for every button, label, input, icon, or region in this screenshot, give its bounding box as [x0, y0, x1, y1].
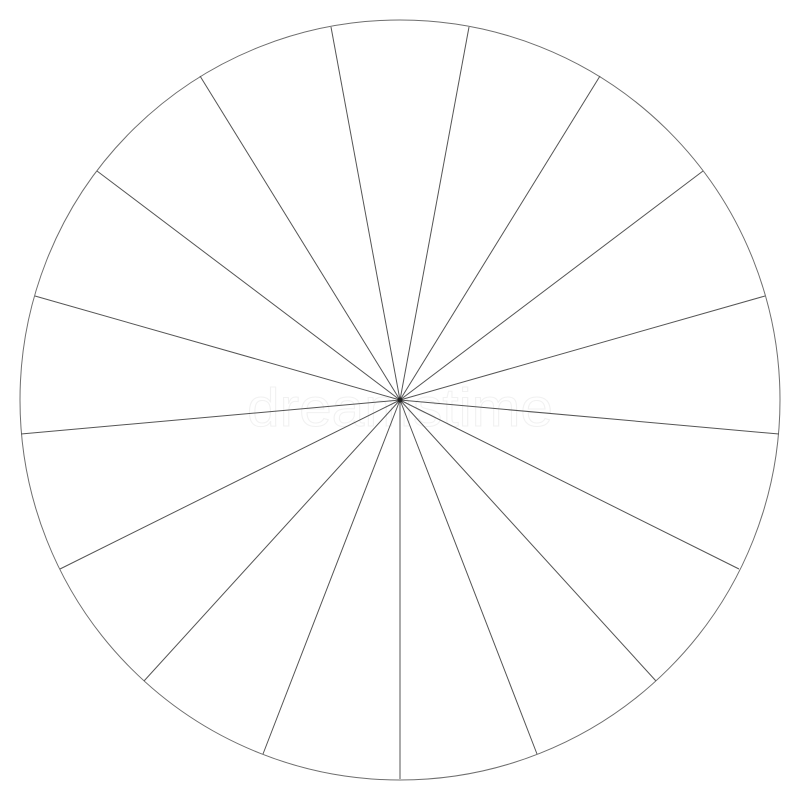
watermark: dreamstime: [247, 378, 553, 438]
center hub: [398, 398, 402, 402]
